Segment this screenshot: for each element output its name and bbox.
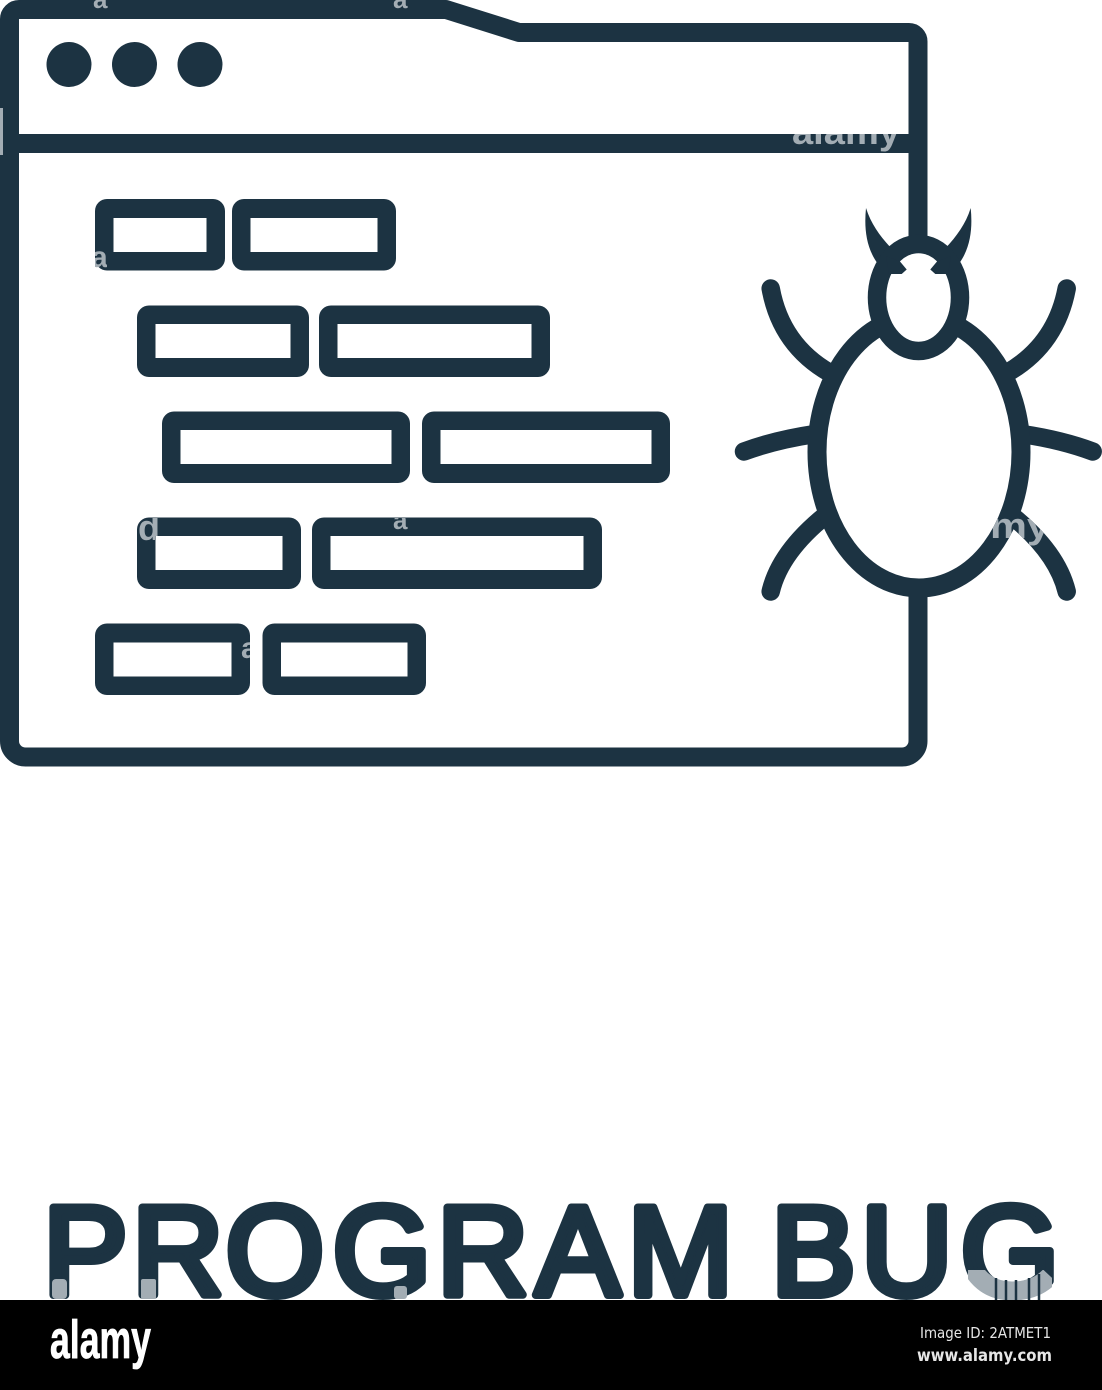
image id: Image ID: 2ATMET1 [920,1324,1051,1342]
watermark fragments on the title [52,1270,1052,1300]
bug body [817,316,1021,588]
code blocks [95,199,670,695]
watermark fragments on the icon: a [393,505,408,535]
watermark fragments on the icon: my [990,505,1050,546]
icon: bug [744,208,1093,592]
window title bar divider [9,134,927,153]
watermark fragments on the icon: d [138,507,160,548]
code row 2 [137,306,550,377]
footer logo: alamy [50,1310,151,1370]
watermark fragments on the icon [0,0,1050,665]
footer bar [0,1300,1102,1390]
watermark fragments on the icon: a [91,241,108,274]
code row 1 [95,199,396,270]
icon: browser window [9,10,927,757]
watermark fragments on the icon: alamy [792,111,900,152]
code row 5 [95,624,426,695]
bug legs [744,288,1093,592]
bug horns [865,208,971,264]
bug head [877,244,960,351]
watermark fragments on the icon: a [241,632,258,665]
title: PROGRAM BUG [43,1180,1059,1322]
window control dots [46,42,222,87]
bug eyes [886,256,951,274]
code row 4 [137,518,602,589]
code row 3 [162,412,670,483]
website: www.alamy.com [917,1346,1052,1366]
